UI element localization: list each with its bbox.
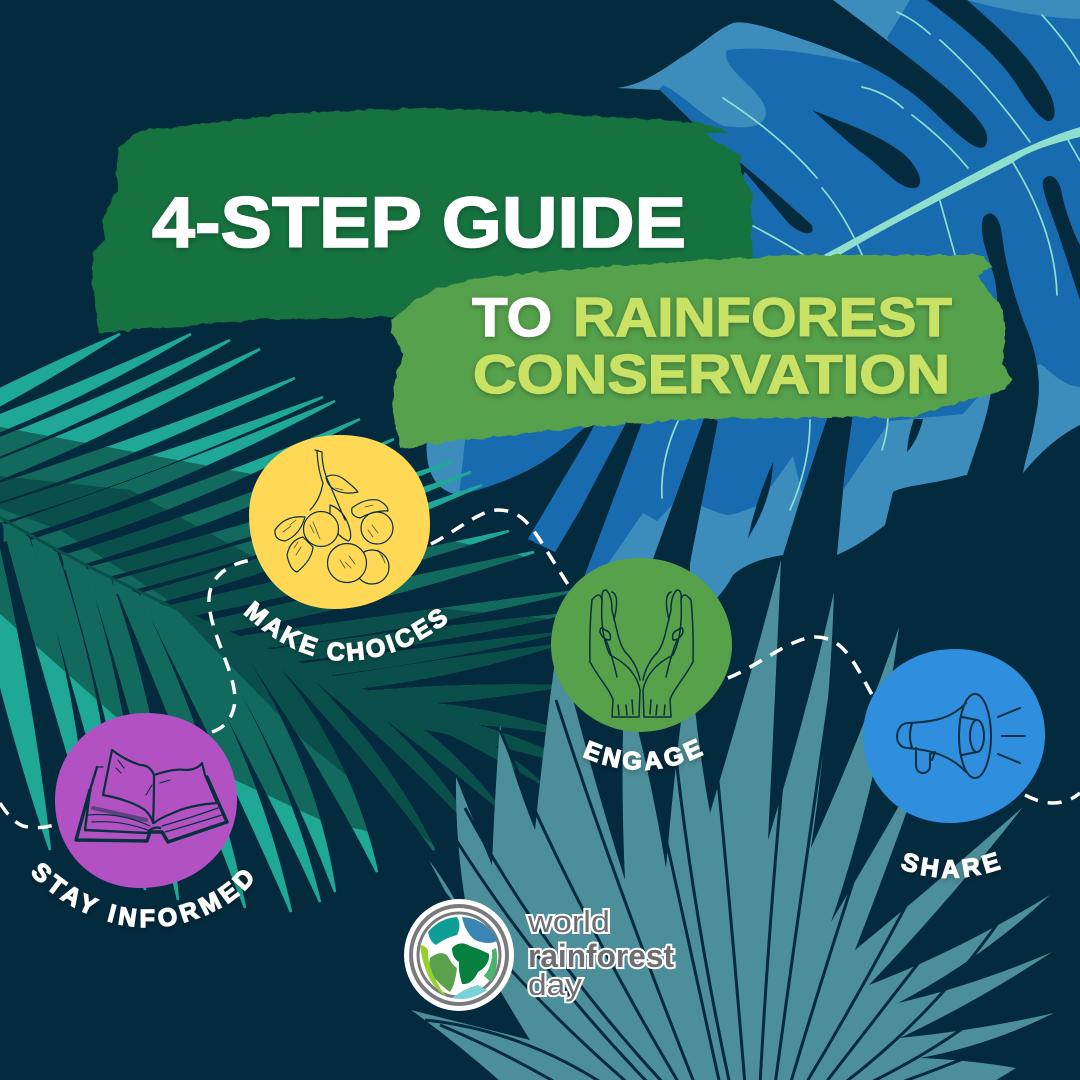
icon: megaphone	[897, 694, 1025, 778]
illustration: monstera leaf	[400, 0, 1080, 620]
step 2: make choices	[249, 435, 430, 609]
logo wordmark: day	[528, 967, 583, 1002]
icon: fruit branch	[275, 450, 393, 584]
logo globe	[404, 899, 514, 1011]
illustration: fan palm	[411, 560, 1054, 1080]
title banner: to rainforest conservation	[390, 255, 1012, 448]
step 1: stay informed	[55, 713, 237, 888]
label: share: SHARE	[901, 852, 1002, 882]
step 4: share	[863, 649, 1045, 823]
icon: cupped hands	[590, 590, 693, 717]
title banner: 4-step guide: 4-STEP GUIDE	[152, 184, 686, 263]
label: stay informed: STAY INFORMED	[32, 863, 253, 928]
dashed path connecting the steps	[0, 510, 1080, 828]
step 3: engage	[551, 558, 732, 732]
logo wordmark: world	[527, 904, 610, 939]
title banner: 4-step guide	[93, 108, 752, 333]
logo wordmark: rainforest	[528, 938, 674, 974]
logo: world rainforest day	[404, 899, 674, 1011]
label: engage: ENGAGE	[582, 738, 704, 774]
title banner: to rainforest conservation: CONSERVATION	[473, 343, 950, 405]
icon: open book	[76, 750, 227, 842]
title banner: to rainforest conservation: RAINFOREST	[573, 286, 952, 348]
title banner: to rainforest conservation: TO	[472, 286, 552, 348]
illustration: palm frond	[0, 334, 585, 912]
label: make choices: MAKE CHOICES	[243, 600, 448, 663]
logo wordmark	[527, 904, 674, 1002]
